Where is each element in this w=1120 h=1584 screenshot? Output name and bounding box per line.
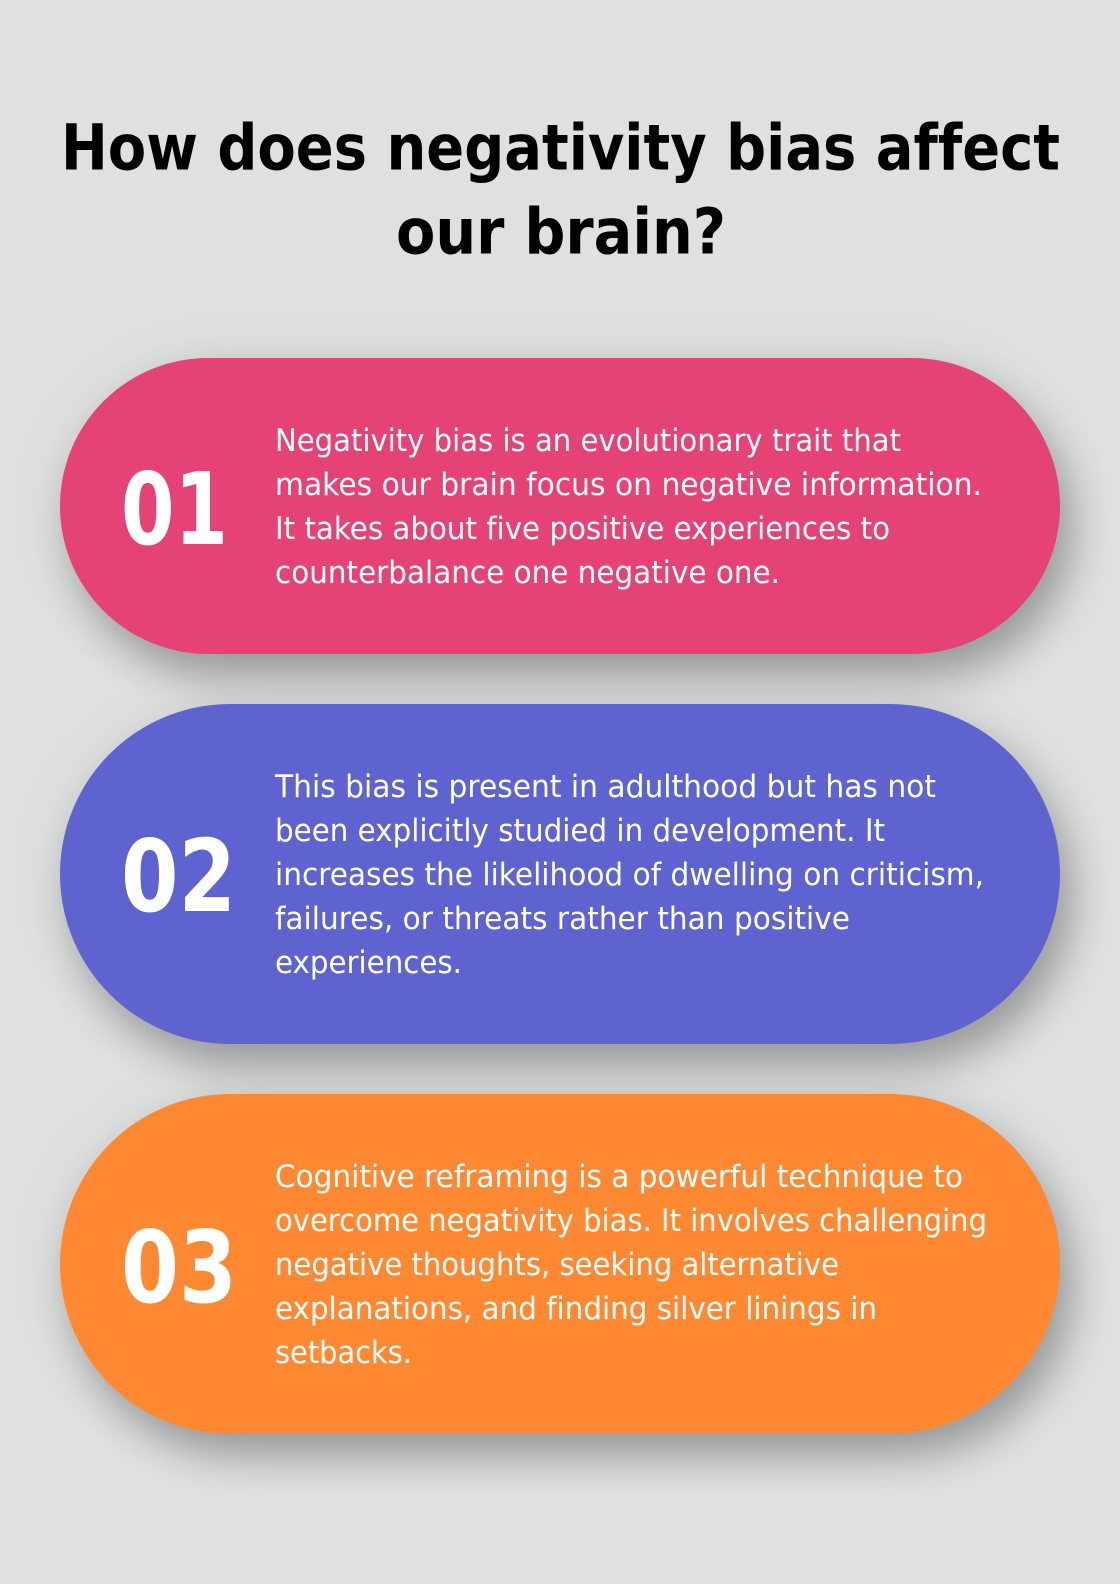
text block 03: negative thoughts, seeking alternative — [275, 1247, 839, 1283]
text block 01 — [275, 423, 982, 591]
number 03: 03 — [121, 1209, 237, 1326]
text block 03: setbacks. — [275, 1335, 412, 1371]
text block 02: been explicitly studied in development. It — [275, 813, 885, 849]
panel: step 01 — [60, 358, 1072, 676]
text block 02: increases the likelihood of dwelling on criticism, — [275, 857, 984, 893]
text block 01: makes our brain focus on negative information. — [275, 467, 982, 503]
text block 03: overcome negativity bias. It involves challenging — [275, 1203, 987, 1239]
text block 03: explanations, and finding silver linings in — [275, 1291, 877, 1327]
text block 02: experiences. — [275, 945, 462, 981]
text block 02 — [274, 769, 984, 981]
number 01: 01 — [121, 451, 228, 568]
text block 01: Negativity bias is an evolutionary trait that — [275, 423, 901, 459]
panel: step 03 — [60, 1094, 1072, 1456]
text block 02: failures, or threats rather than positive — [275, 901, 850, 937]
text block 03: Cognitive reframing is a powerful technique to — [275, 1159, 963, 1195]
text block 03 — [275, 1159, 987, 1371]
text block 01: It takes about five positive experiences to — [275, 511, 890, 547]
title — [61, 112, 1060, 268]
title: our brain? — [396, 196, 726, 268]
text block 01: counterbalance one negative one. — [275, 555, 780, 591]
text block 02: This bias is present in adulthood but has not — [274, 769, 936, 805]
panel: step 02 — [60, 704, 1072, 1066]
number 02: 02 — [121, 818, 236, 935]
